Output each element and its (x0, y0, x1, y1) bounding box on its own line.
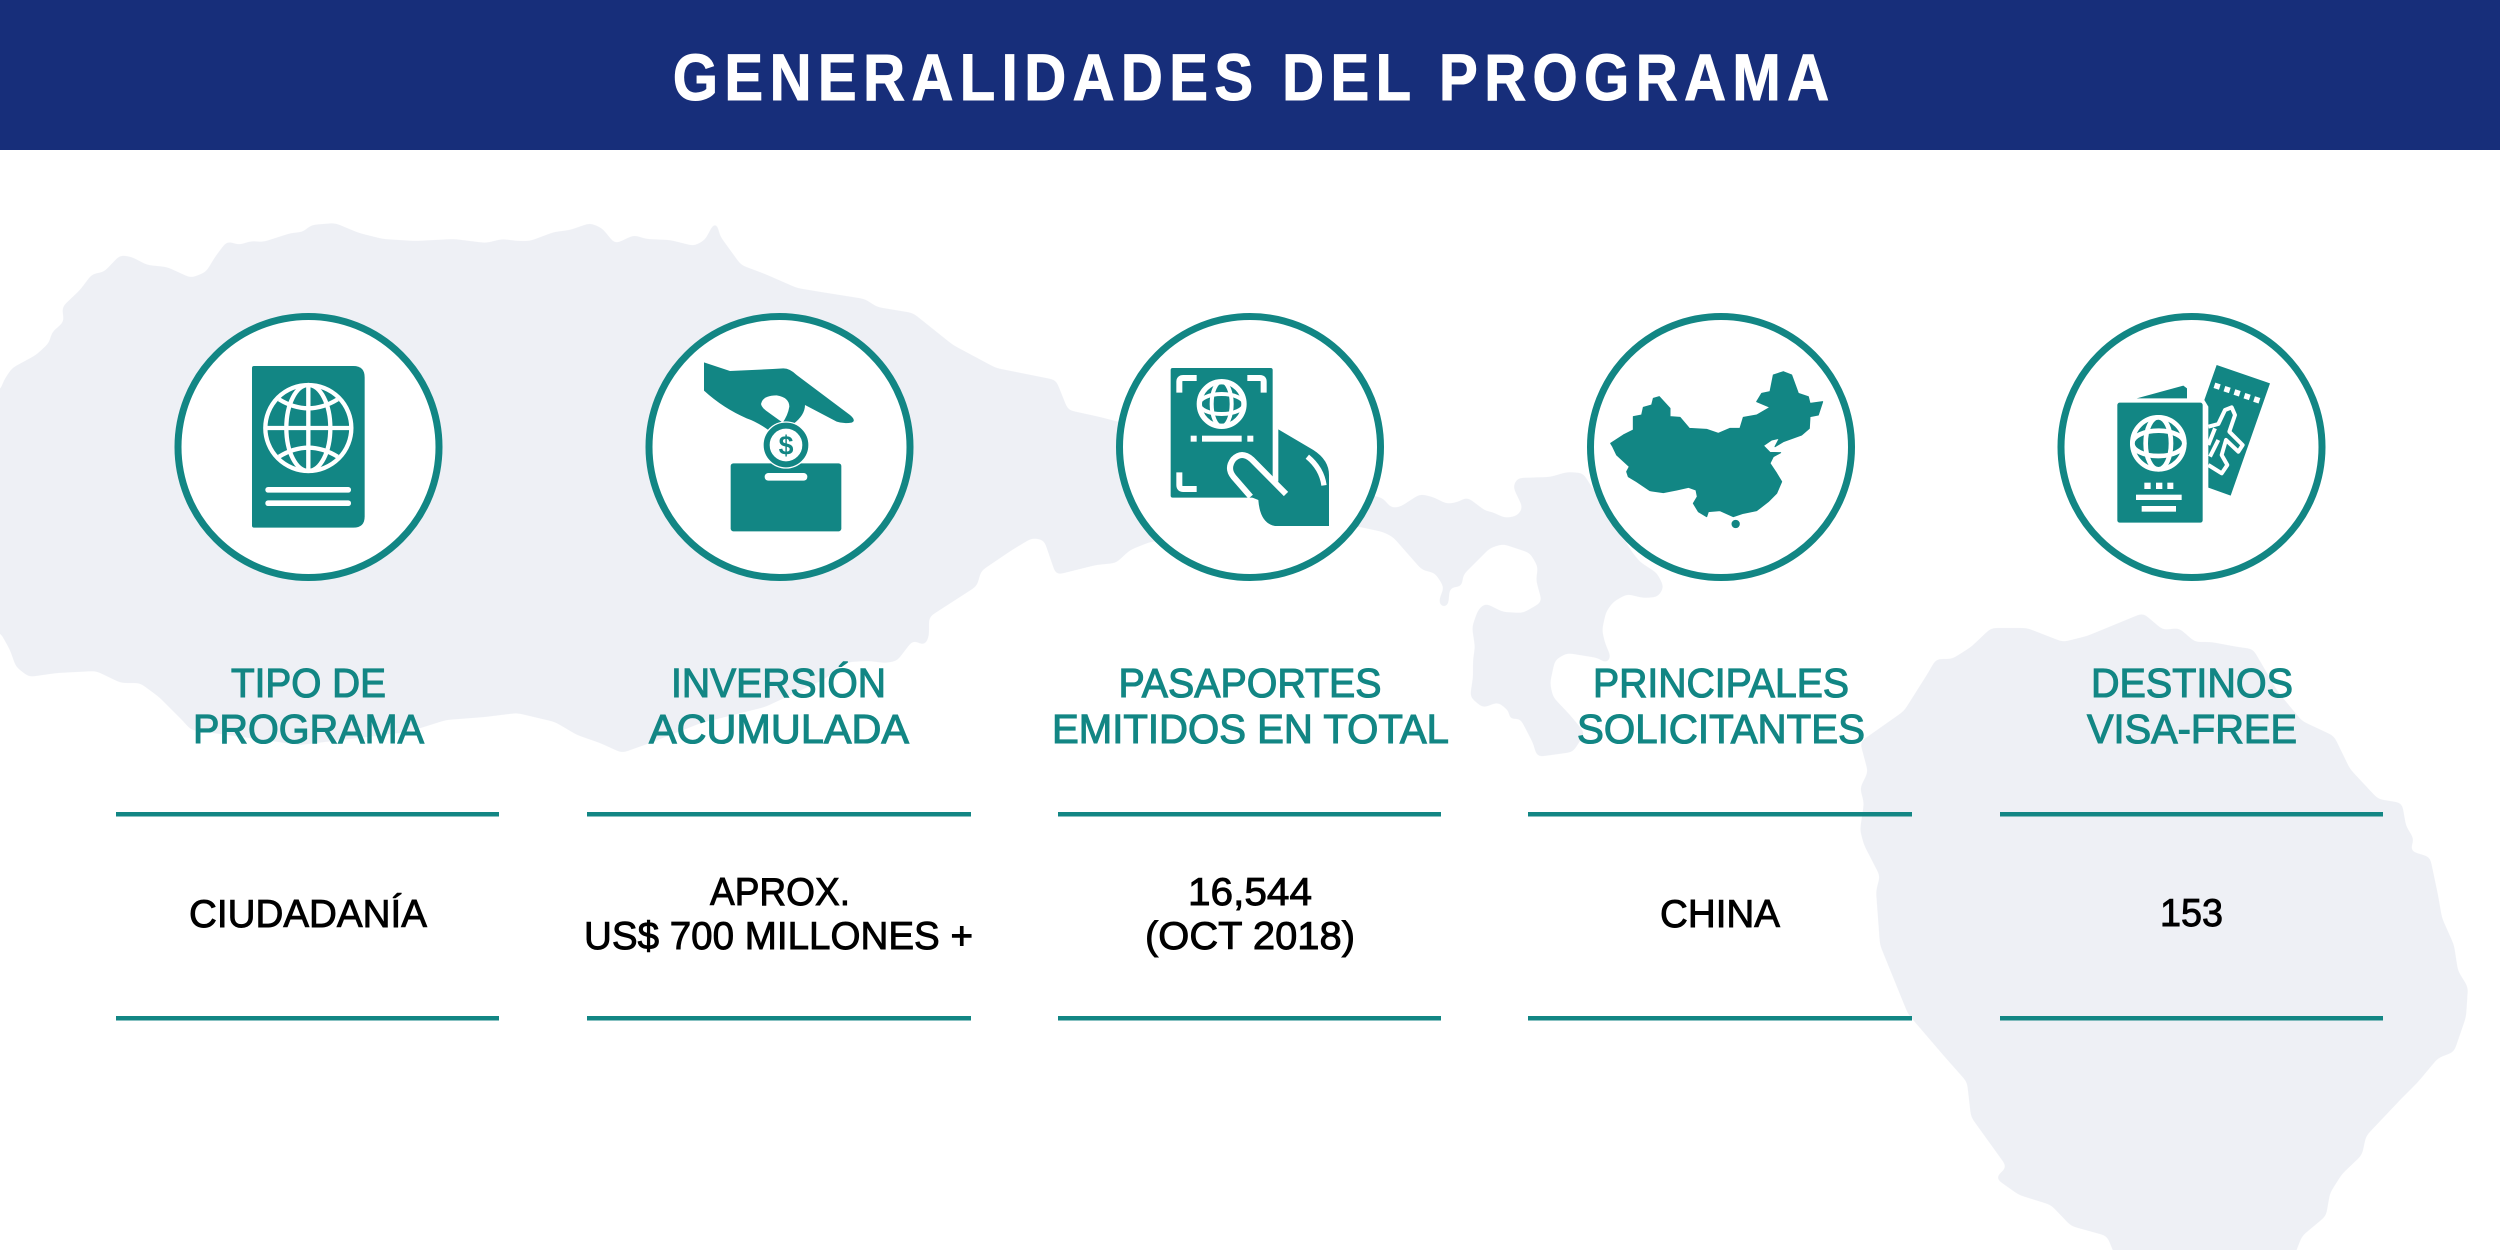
icon: hand scanning passport (1120, 316, 1380, 578)
column: principales solicitantes (1528, 316, 1912, 1020)
column: tipo de programa (116, 316, 499, 1020)
column: destinos visa-free: VISA-FREE (2087, 706, 2297, 752)
value: 153 (2160, 892, 2223, 935)
column: destinos visa-free (2000, 316, 2383, 1020)
icon: map of China (1590, 316, 1852, 578)
icon: passport with globe (178, 316, 439, 578)
column: inversion acumulada (584, 316, 973, 1020)
value: APROX. (710, 871, 850, 914)
heading: PRINCIPALES (1593, 660, 1849, 706)
value: CIUDADANÍA (189, 893, 427, 936)
heading: PASAPORTES (1118, 660, 1382, 706)
header banner (0, 0, 2500, 150)
column: inversion acumulada: US$ 700 MILLONES + (584, 915, 973, 958)
heading: DESTINOS (2091, 660, 2293, 706)
column: principales solicitantes: SOLICITANTES (1577, 706, 1865, 752)
column: pasaportes emitidos: (OCT 2018) (1145, 915, 1355, 958)
column: inversion acumulada: ACUMULADA (649, 706, 910, 752)
icon: hand dropping coin in box: $ (779, 431, 794, 461)
title: GENERALIDADES DEL PROGRAMA (673, 42, 1829, 115)
value: 16,544 (1188, 871, 1312, 914)
column: pasaportes emitidos: EMITIDOS EN TOTAL (1052, 706, 1449, 752)
heading: INVERSIÓN (671, 660, 886, 706)
column: tipo de programa: PROGRAMA (193, 706, 425, 752)
column: pasaportes emitidos (1052, 316, 1449, 1020)
icon: passport and plane ticket (2061, 316, 2322, 578)
icon: hand dropping coin in box (649, 316, 910, 578)
heading: TIPO DE (231, 660, 386, 706)
value: CHINA (1660, 893, 1780, 936)
